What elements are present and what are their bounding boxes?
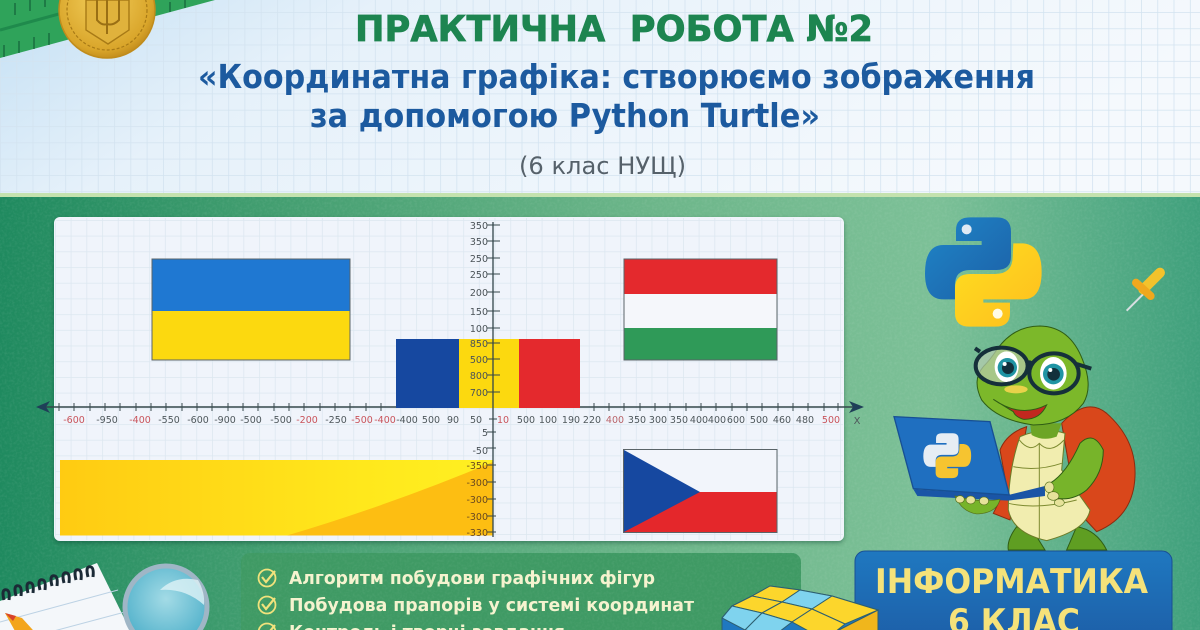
x axis labels: 500	[517, 415, 535, 426]
y axis labels: 800	[470, 371, 488, 382]
icon: python logo	[925, 217, 1042, 327]
y axis labels: 250	[470, 270, 488, 281]
x axis labels: -400	[129, 415, 151, 426]
x axis labels: 400	[690, 415, 708, 426]
x axis labels: -500	[351, 415, 373, 426]
flag: Romania	[396, 339, 580, 408]
title: practical work: ПРАКТИЧНА РОБОТА №2	[355, 9, 873, 50]
turtle belly	[1008, 431, 1090, 541]
y axis labels: -300	[466, 478, 488, 489]
icon: colour cube	[722, 586, 878, 630]
flag: Ukraine	[152, 259, 350, 360]
y axis labels: 350	[470, 237, 488, 248]
y axis labels: 5	[482, 428, 488, 439]
turtle head	[977, 326, 1088, 425]
x axis labels: -400	[396, 415, 418, 426]
icon: magnifying glass	[125, 566, 207, 630]
panel: coordinate grid	[54, 217, 844, 541]
turtle legs	[1008, 527, 1107, 550]
x axis labels: 350	[670, 415, 688, 426]
y axis labels: 850	[470, 339, 488, 350]
glasses and eyes	[975, 348, 1091, 393]
y axis labels: 350	[470, 221, 488, 232]
turtle arm	[1050, 438, 1103, 499]
x axis labels: 500	[750, 415, 768, 426]
y axis labels: 200	[470, 288, 488, 299]
x axis labels: -600	[63, 415, 85, 426]
ruler	[0, 0, 215, 58]
x axis labels: -600	[187, 415, 209, 426]
x axis labels: -200	[296, 415, 318, 426]
x axis labels: 500	[822, 415, 840, 426]
turtle shell	[993, 407, 1135, 532]
flag: Czech Republic	[624, 450, 777, 532]
y axis labels: 700	[470, 388, 488, 399]
y axis labels: -330	[466, 528, 488, 539]
x axis labels: 400	[708, 415, 726, 426]
x axis labels: 350	[628, 415, 646, 426]
x axis with arrows and ticks	[36, 401, 864, 413]
x axis labels	[63, 415, 861, 427]
grade note: (6 клас НУЩ)	[519, 152, 686, 180]
icon: notepad with pencil	[0, 563, 135, 630]
turtle neck	[1030, 423, 1062, 439]
laptop	[894, 417, 1045, 501]
subtitle line 1: «Координатна графіка: створюємо зображення	[198, 57, 1035, 96]
y axis labels: -50	[472, 446, 488, 457]
y axis with ticks	[487, 222, 500, 537]
x axis labels: 50	[470, 415, 482, 426]
y axis labels: -350	[466, 461, 488, 472]
turtle mascot with laptop	[894, 326, 1135, 550]
topic 1: Алгоритм побудови графічних фігур	[289, 568, 655, 589]
x axis labels: -550	[158, 415, 180, 426]
flag: Hungary	[624, 259, 777, 360]
x axis labels: -900	[214, 415, 236, 426]
y axis labels: 100	[470, 324, 488, 335]
x axis labels: -250	[325, 415, 347, 426]
x axis labels: 480	[796, 415, 814, 426]
x axis labels: 300	[649, 415, 667, 426]
panel: info badge	[855, 551, 1172, 630]
green background	[0, 193, 1200, 630]
x axis labels: 460	[773, 415, 791, 426]
x axis labels: -950	[96, 415, 118, 426]
y axis labels: -300	[466, 495, 488, 506]
icon: push pin	[1127, 273, 1160, 311]
y axis labels: 250	[470, 254, 488, 265]
subtitle line 2: за допомогою Python Turtle»	[310, 96, 820, 135]
yellow shape	[60, 460, 493, 536]
x axis labels: 90	[447, 415, 459, 426]
y axis labels: -300	[466, 512, 488, 523]
x axis labels: 190	[562, 415, 580, 426]
y axis labels: 150	[470, 307, 488, 318]
panel: topics list	[241, 553, 801, 630]
turtle hands	[955, 482, 1064, 514]
topic 2: Побудова прапорів у системі координат	[289, 595, 695, 616]
x axis labels: 400	[606, 415, 624, 426]
belly segments and collar	[1008, 440, 1077, 538]
y axis labels: 500	[470, 355, 488, 366]
x axis labels: 100	[539, 415, 557, 426]
x axis labels: 500	[422, 415, 440, 426]
x axis labels: 600	[727, 415, 745, 426]
x axis labels: -500	[240, 415, 262, 426]
badge heading: ІНФОРМАТИКА	[875, 562, 1149, 602]
x axis labels: 10	[497, 415, 509, 426]
y axis labels	[466, 221, 488, 539]
header background with grid	[0, 0, 1200, 194]
x axis labels: 220	[583, 415, 601, 426]
x axis labels: X	[854, 416, 861, 427]
nose and mouth	[993, 385, 1047, 419]
x axis labels: -500	[270, 415, 292, 426]
icon: gold medal with trident	[59, 0, 155, 58]
x axis labels: -400	[374, 415, 396, 426]
